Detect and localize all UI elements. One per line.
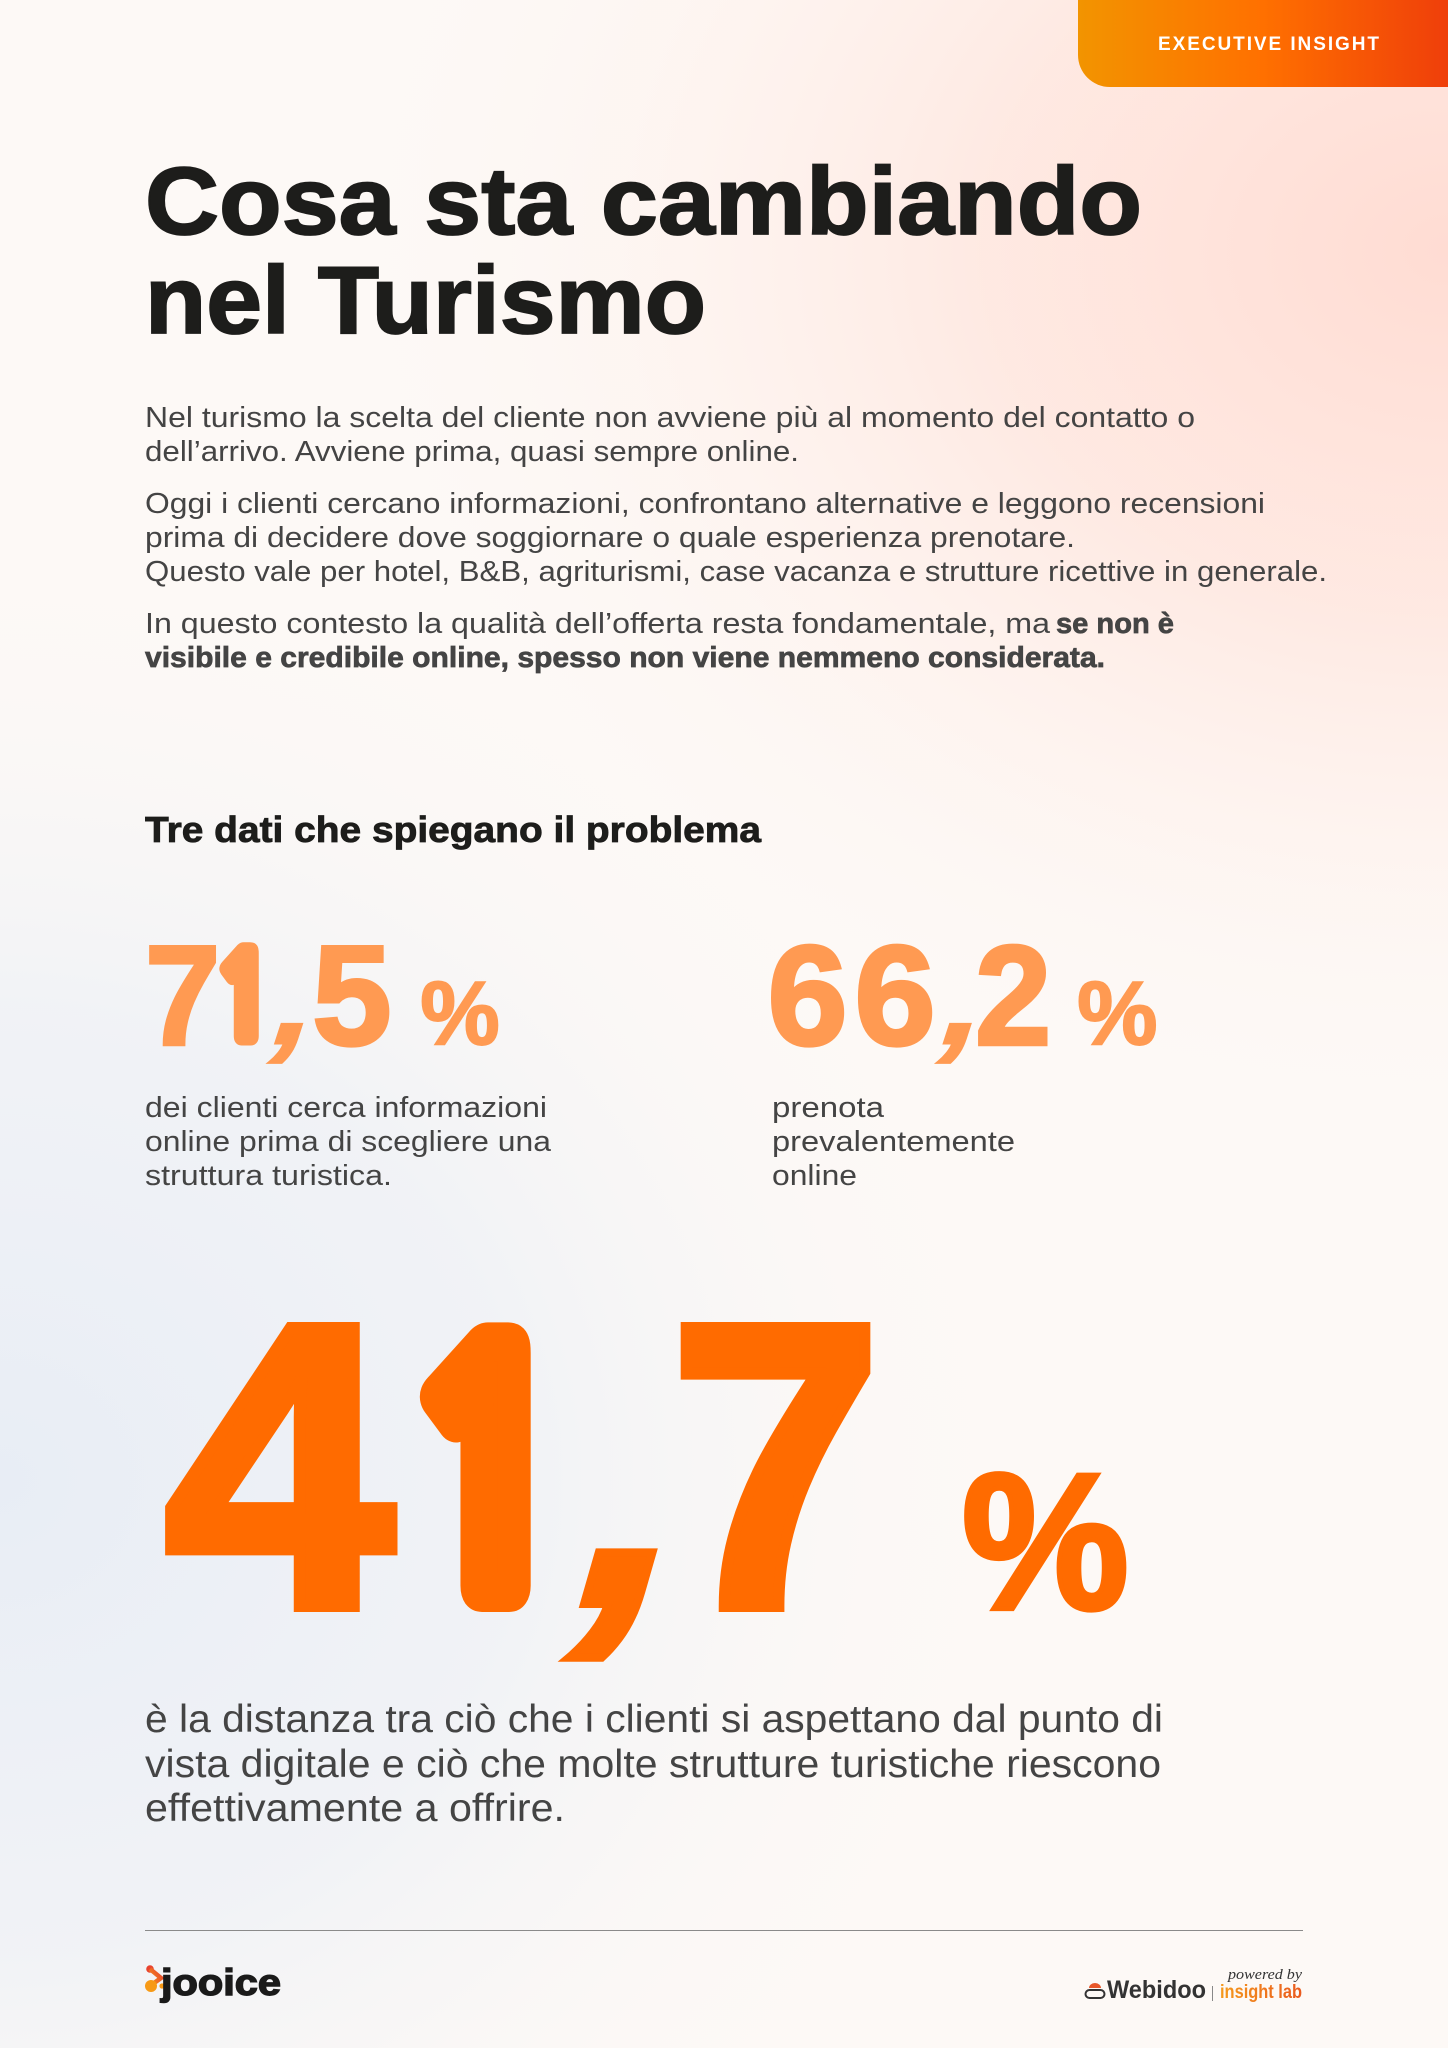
stat description 2 bbox=[772, 1092, 1015, 1192]
stat: 41,7 % bbox=[165, 1240, 1129, 1692]
badge: executive insight: EXECUTIVE INSIGHT bbox=[1158, 34, 1379, 55]
stat: 71,5 %: 7 bbox=[145, 916, 220, 1076]
intro text block: Nel turismo la scelta del cliente non avviene più al momento del contatto o bbox=[145, 402, 1195, 434]
logo: webidoo insight lab: insight lab bbox=[1220, 1982, 1302, 2003]
intro text block: se non è bbox=[1056, 608, 1174, 640]
intro text block: visibile e credibile online, spesso non viene nemmeno considerata. bbox=[145, 642, 1105, 674]
main stat description: è la distanza tra ciò che i clienti si aspettano dal punto di bbox=[145, 1698, 1163, 1741]
stat: 66,2 %: 6 bbox=[768, 916, 848, 1076]
stat: 71,5 %: , bbox=[258, 931, 341, 1070]
stat: 41,7 %: 7 bbox=[670, 1240, 881, 1692]
intro text block: prima di decidere dove soggiornare o quale esperienza prenotare. bbox=[145, 522, 1075, 554]
logo: webidoo insight lab: Webidoo bbox=[1107, 1976, 1206, 2004]
stat: 41,7 %: , bbox=[536, 1290, 753, 1678]
stat description 1 bbox=[145, 1092, 552, 1192]
logo: webidoo insight lab bbox=[1086, 1967, 1302, 2004]
main stat description: vista digitale e ciò che molte strutture turistiche riescono bbox=[145, 1743, 1161, 1786]
title bbox=[145, 148, 1142, 354]
stat: 66,2 %: % bbox=[1077, 964, 1158, 1064]
stat: 71,5 %: % bbox=[420, 964, 500, 1064]
stat: 66,2 %: 6 bbox=[854, 916, 936, 1076]
badge: executive insight bbox=[1078, 0, 1448, 87]
stat description 1: online prima di scegliere una bbox=[145, 1126, 552, 1158]
main stat description: effettivamente a offrire. bbox=[145, 1787, 565, 1830]
stat: 66,2 % bbox=[768, 916, 1158, 1076]
title: Cosa sta cambiando bbox=[145, 148, 1142, 255]
title: nel Turismo bbox=[145, 247, 706, 354]
stat description 2: prevalentemente bbox=[772, 1126, 1015, 1158]
stat: 71,5 %: 1 bbox=[215, 940, 274, 1055]
logo: jooice: jooice bbox=[160, 1962, 281, 2003]
intro text block bbox=[145, 402, 1327, 674]
main stat description bbox=[145, 1698, 1163, 1830]
stat description 1: dei clienti cerca informazioni bbox=[145, 1092, 547, 1124]
stat: 71,5 %: 5 bbox=[312, 916, 392, 1076]
stat description 1: struttura turistica. bbox=[145, 1160, 392, 1192]
stat: 71,5 % bbox=[145, 916, 500, 1076]
intro text block: dell’arrivo. Avviene prima, quasi sempre online. bbox=[145, 436, 799, 468]
stat: 41,7 %: % bbox=[962, 1434, 1129, 1651]
intro text block: Questo vale per hotel, B&B, agriturismi, case vacanza e strutture ricettive in generale. bbox=[145, 556, 1327, 588]
stat: 41,7 %: 4 bbox=[165, 1240, 396, 1692]
stat: 41,7 %: 1 bbox=[408, 1316, 572, 1638]
stat: 66,2 %: , bbox=[926, 931, 1009, 1070]
section heading: Tre dati che spiegano il problema bbox=[145, 809, 762, 850]
intro text block: Oggi i clienti cercano informazioni, confrontano alternative e leggono recensioni bbox=[145, 488, 1265, 520]
stat: 66,2 %: 2 bbox=[975, 916, 1051, 1076]
intro text block: In questo contesto la qualità dell’offerta resta fondamentale, ma bbox=[145, 608, 1051, 640]
stat description 2: online bbox=[772, 1160, 857, 1192]
logo: webidoo insight lab: powered by bbox=[1227, 1967, 1302, 1983]
stat description 2: prenota bbox=[772, 1092, 885, 1124]
